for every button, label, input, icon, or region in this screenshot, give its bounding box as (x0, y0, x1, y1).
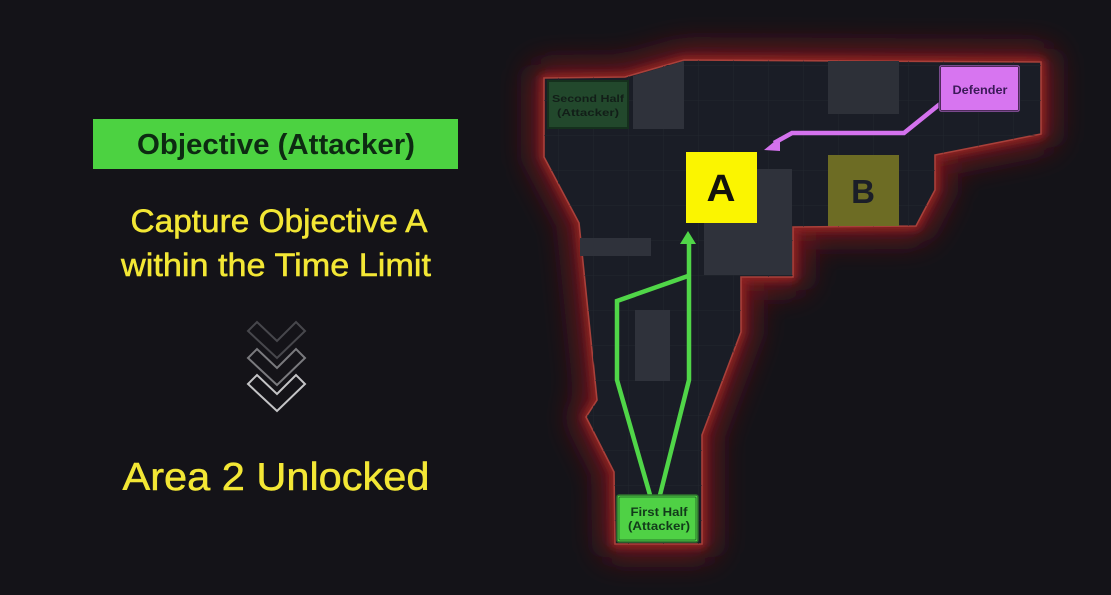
text block: objective description: within the Time Limit (120, 247, 431, 283)
objective B: B (851, 173, 875, 210)
map wide red glow (544, 60, 1041, 544)
spawn: Defender: Defender (952, 85, 1008, 97)
text block: objective description: Capture Objective A (130, 203, 428, 239)
text block: Area 2 Unlocked: Area 2 Unlocked (122, 456, 430, 499)
spawn: First Half (Attacker) (617, 495, 698, 542)
spawn: Second Half (Attacker) (548, 81, 628, 128)
map floor (530, 50, 1050, 550)
objective A (686, 152, 757, 223)
arrow: defender route (764, 104, 940, 151)
spawn: First Half (Attacker): First Half (630, 507, 688, 519)
spawn: Second Half (Attacker): Second Half (552, 93, 625, 105)
panel: objective summary (93, 119, 458, 499)
text block: objective description (120, 203, 431, 283)
arrow: attacker routes (617, 231, 696, 495)
map near red glow (544, 60, 1041, 544)
objective A: A (706, 168, 736, 210)
spawn: First Half (Attacker): (Attacker) (628, 521, 690, 533)
spawn: Defender (939, 65, 1020, 112)
icon: triple downward chevrons (248, 322, 305, 411)
spawn: Second Half (Attacker): (Attacker) (557, 107, 619, 119)
objective B (828, 155, 899, 226)
panel: map (530, 50, 1050, 550)
heading banner: Objective (Attacker) (93, 119, 458, 169)
heading banner: Objective (Attacker): Objective (Attacker) (137, 129, 415, 161)
cover blocks (580, 61, 899, 381)
